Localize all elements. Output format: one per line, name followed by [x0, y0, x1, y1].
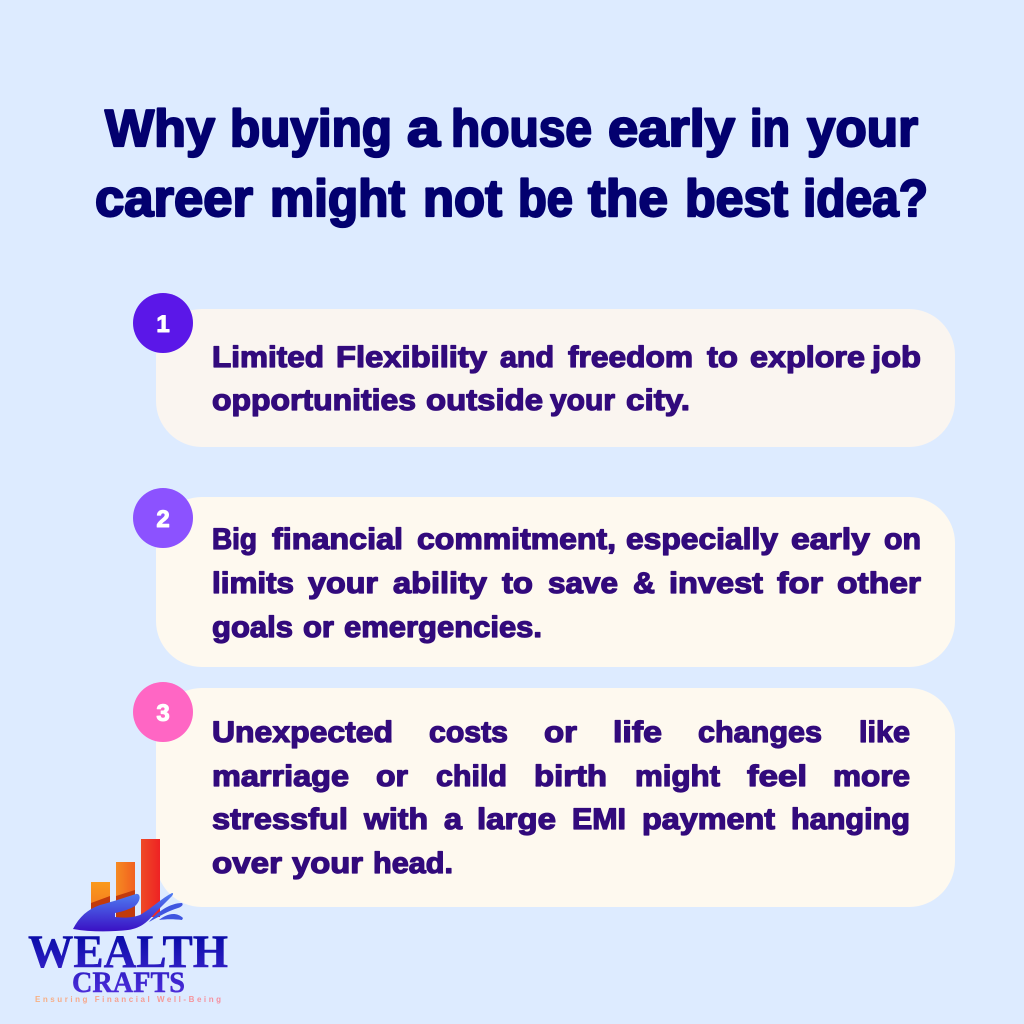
title: best: [685, 170, 788, 228]
point 3 text: might: [635, 760, 720, 793]
point 1 text: Limited: [212, 341, 324, 374]
title: might: [270, 170, 405, 228]
point 2 text: commitment,: [417, 523, 616, 556]
point 2 text: save: [548, 567, 618, 600]
icon: rising bar chart: [91, 839, 160, 922]
point 3 text: life: [613, 716, 662, 749]
title: [95, 100, 928, 228]
title: career: [95, 170, 253, 228]
point 3 text: a: [444, 803, 462, 836]
point 3 text: like: [859, 716, 910, 749]
title: Why: [105, 100, 215, 158]
title: idea?: [803, 170, 928, 228]
title: house: [451, 100, 592, 158]
panel: point 2: [133, 488, 955, 667]
point 2 text: [212, 523, 921, 644]
title: a: [407, 100, 441, 158]
point 3 text: Unexpected: [212, 716, 393, 749]
point 2 text: invest: [669, 567, 763, 600]
point 3 text: or: [376, 760, 408, 793]
point 2 text: &: [633, 567, 655, 600]
number badge 1: 1: [156, 311, 170, 338]
point 3 text: hanging: [791, 803, 910, 836]
logo: Wealth Crafts: [28, 839, 228, 1004]
card 2 background: [156, 497, 955, 667]
point 2 text: financial: [272, 523, 403, 556]
point 1 text: city.: [626, 384, 690, 417]
number badge 1: [133, 293, 193, 353]
point 2 text: other: [837, 567, 921, 600]
point 3 text: your: [292, 847, 363, 880]
point 3 text: [212, 716, 910, 880]
point 1 text: outside: [426, 384, 543, 417]
point 3 text: changes: [698, 716, 822, 749]
point 2 text: early: [791, 523, 870, 556]
point 1 text: opportunities: [212, 384, 416, 417]
title: your: [807, 100, 918, 158]
point 2 text: emergencies.: [344, 611, 542, 644]
point 3 text: payment: [642, 803, 775, 836]
point 3 text: head.: [373, 847, 453, 880]
point 3 text: child: [436, 760, 507, 793]
point 2 text: Big: [212, 523, 257, 556]
point 2 text: ability: [393, 567, 487, 600]
point 3 text: or: [544, 716, 577, 749]
card 1 background: [156, 309, 955, 447]
point 3 text: over: [212, 847, 282, 880]
point 1 text: job: [871, 341, 921, 374]
title: buying: [230, 100, 392, 158]
point 3 text: feel: [747, 760, 807, 793]
panel: point 1: [133, 293, 955, 447]
logo wordmark WEALTH: WEALTH: [28, 926, 228, 978]
number badge 3: 3: [156, 700, 170, 727]
icon: open hand: [73, 893, 183, 931]
card 3 background: [156, 688, 955, 907]
point 2 text: especially: [626, 523, 778, 556]
title: not: [423, 170, 502, 228]
point 2 text: to: [502, 567, 533, 600]
logo wordmark CRAFTS: CRAFTS: [72, 966, 185, 999]
point 1 text: freedom: [568, 341, 693, 374]
point 3 text: EMI: [572, 803, 626, 836]
title: be: [518, 170, 573, 228]
point 1 text: [212, 341, 921, 417]
point 1 text: your: [550, 384, 615, 417]
point 1 text: explore: [750, 341, 865, 374]
point 3 text: large: [477, 803, 556, 836]
point 2 text: limits: [212, 567, 294, 600]
point 3 text: with: [363, 803, 428, 836]
point 3 text: birth: [534, 760, 607, 793]
point 3 text: marriage: [212, 760, 349, 793]
point 2 text: or: [303, 611, 334, 644]
point 3 text: stressful: [212, 803, 348, 836]
logo tagline: Ensuring Financial Well-Being: [35, 995, 221, 1004]
point 2 text: for: [777, 567, 823, 600]
title: the: [588, 170, 668, 228]
panel: point 3: [133, 682, 955, 907]
title: early: [608, 100, 735, 158]
point 1 text: to: [707, 341, 738, 374]
number badge 2: 2: [156, 506, 170, 533]
point 3 text: more: [833, 760, 910, 793]
point 2 text: goals: [212, 611, 293, 644]
point 3 text: costs: [429, 716, 508, 749]
number badge 3: [133, 682, 193, 742]
point 1 text: Flexibility: [336, 341, 487, 374]
point 1 text: and: [500, 341, 554, 374]
point 2 text: on: [884, 523, 921, 556]
number badge 2: [133, 488, 193, 548]
title: in: [750, 100, 790, 158]
point 2 text: your: [308, 567, 378, 600]
